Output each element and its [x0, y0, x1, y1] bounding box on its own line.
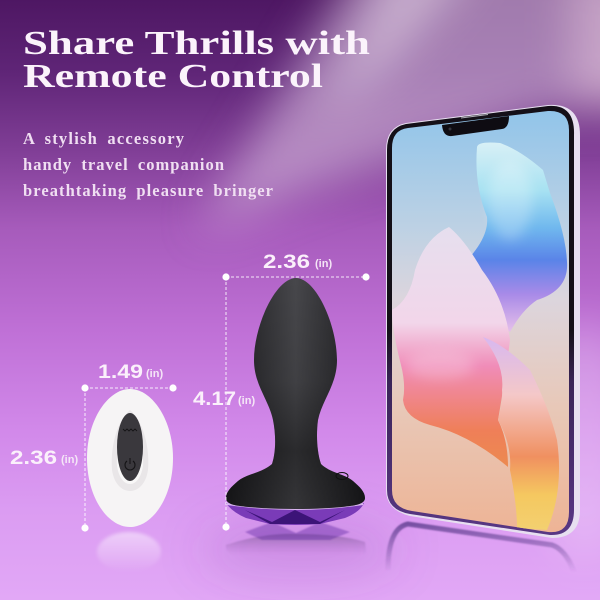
power icon: [125, 458, 135, 470]
petal: left: [392, 227, 510, 467]
phone body: [386, 105, 580, 538]
plug dimensions: [193, 252, 370, 531]
petal: right: [483, 337, 559, 530]
notch: [442, 116, 509, 136]
plug body: [226, 278, 365, 509]
product reflection: [226, 534, 366, 555]
label: 2.36 in: 2.36: [263, 252, 310, 273]
speaker: [461, 114, 488, 118]
phone: [386, 105, 580, 572]
remote body: [87, 389, 173, 527]
feature list: [23, 129, 273, 200]
remote dimensions: (in): [61, 454, 78, 466]
remote dimensions: (in): [146, 368, 163, 380]
feature list: A stylish accessory: [23, 129, 185, 148]
plug shading: [226, 278, 365, 509]
screen: [388, 105, 573, 537]
button recess: [112, 410, 148, 491]
plug dimensions: (in): [238, 395, 255, 407]
label: 1.49 in: 1.49: [98, 362, 143, 383]
phone bezel: [387, 106, 574, 535]
title: Share Thrills with: [23, 25, 370, 62]
feature list: handy travel companion: [23, 155, 224, 174]
button: [336, 472, 348, 480]
phone reflection: [388, 524, 574, 572]
remote reflection: [97, 532, 161, 572]
remote: [87, 389, 173, 572]
wave icon: [123, 429, 137, 431]
label: 2.36 in: 2.36: [10, 448, 57, 469]
gem base: [226, 503, 364, 525]
button panel: [117, 413, 143, 481]
plug product: [226, 278, 366, 555]
petal: blue: [470, 142, 567, 332]
feature list: breathtaking pleasure bringer: [23, 181, 273, 200]
title: [23, 25, 370, 95]
remote dimensions: [10, 362, 177, 532]
label: 4.17 in: 4.17: [193, 389, 236, 410]
gem reflection: [245, 522, 350, 540]
title: Remote Control: [23, 58, 323, 95]
light beam: [200, 0, 600, 580]
plug dimensions: (in): [315, 258, 332, 270]
